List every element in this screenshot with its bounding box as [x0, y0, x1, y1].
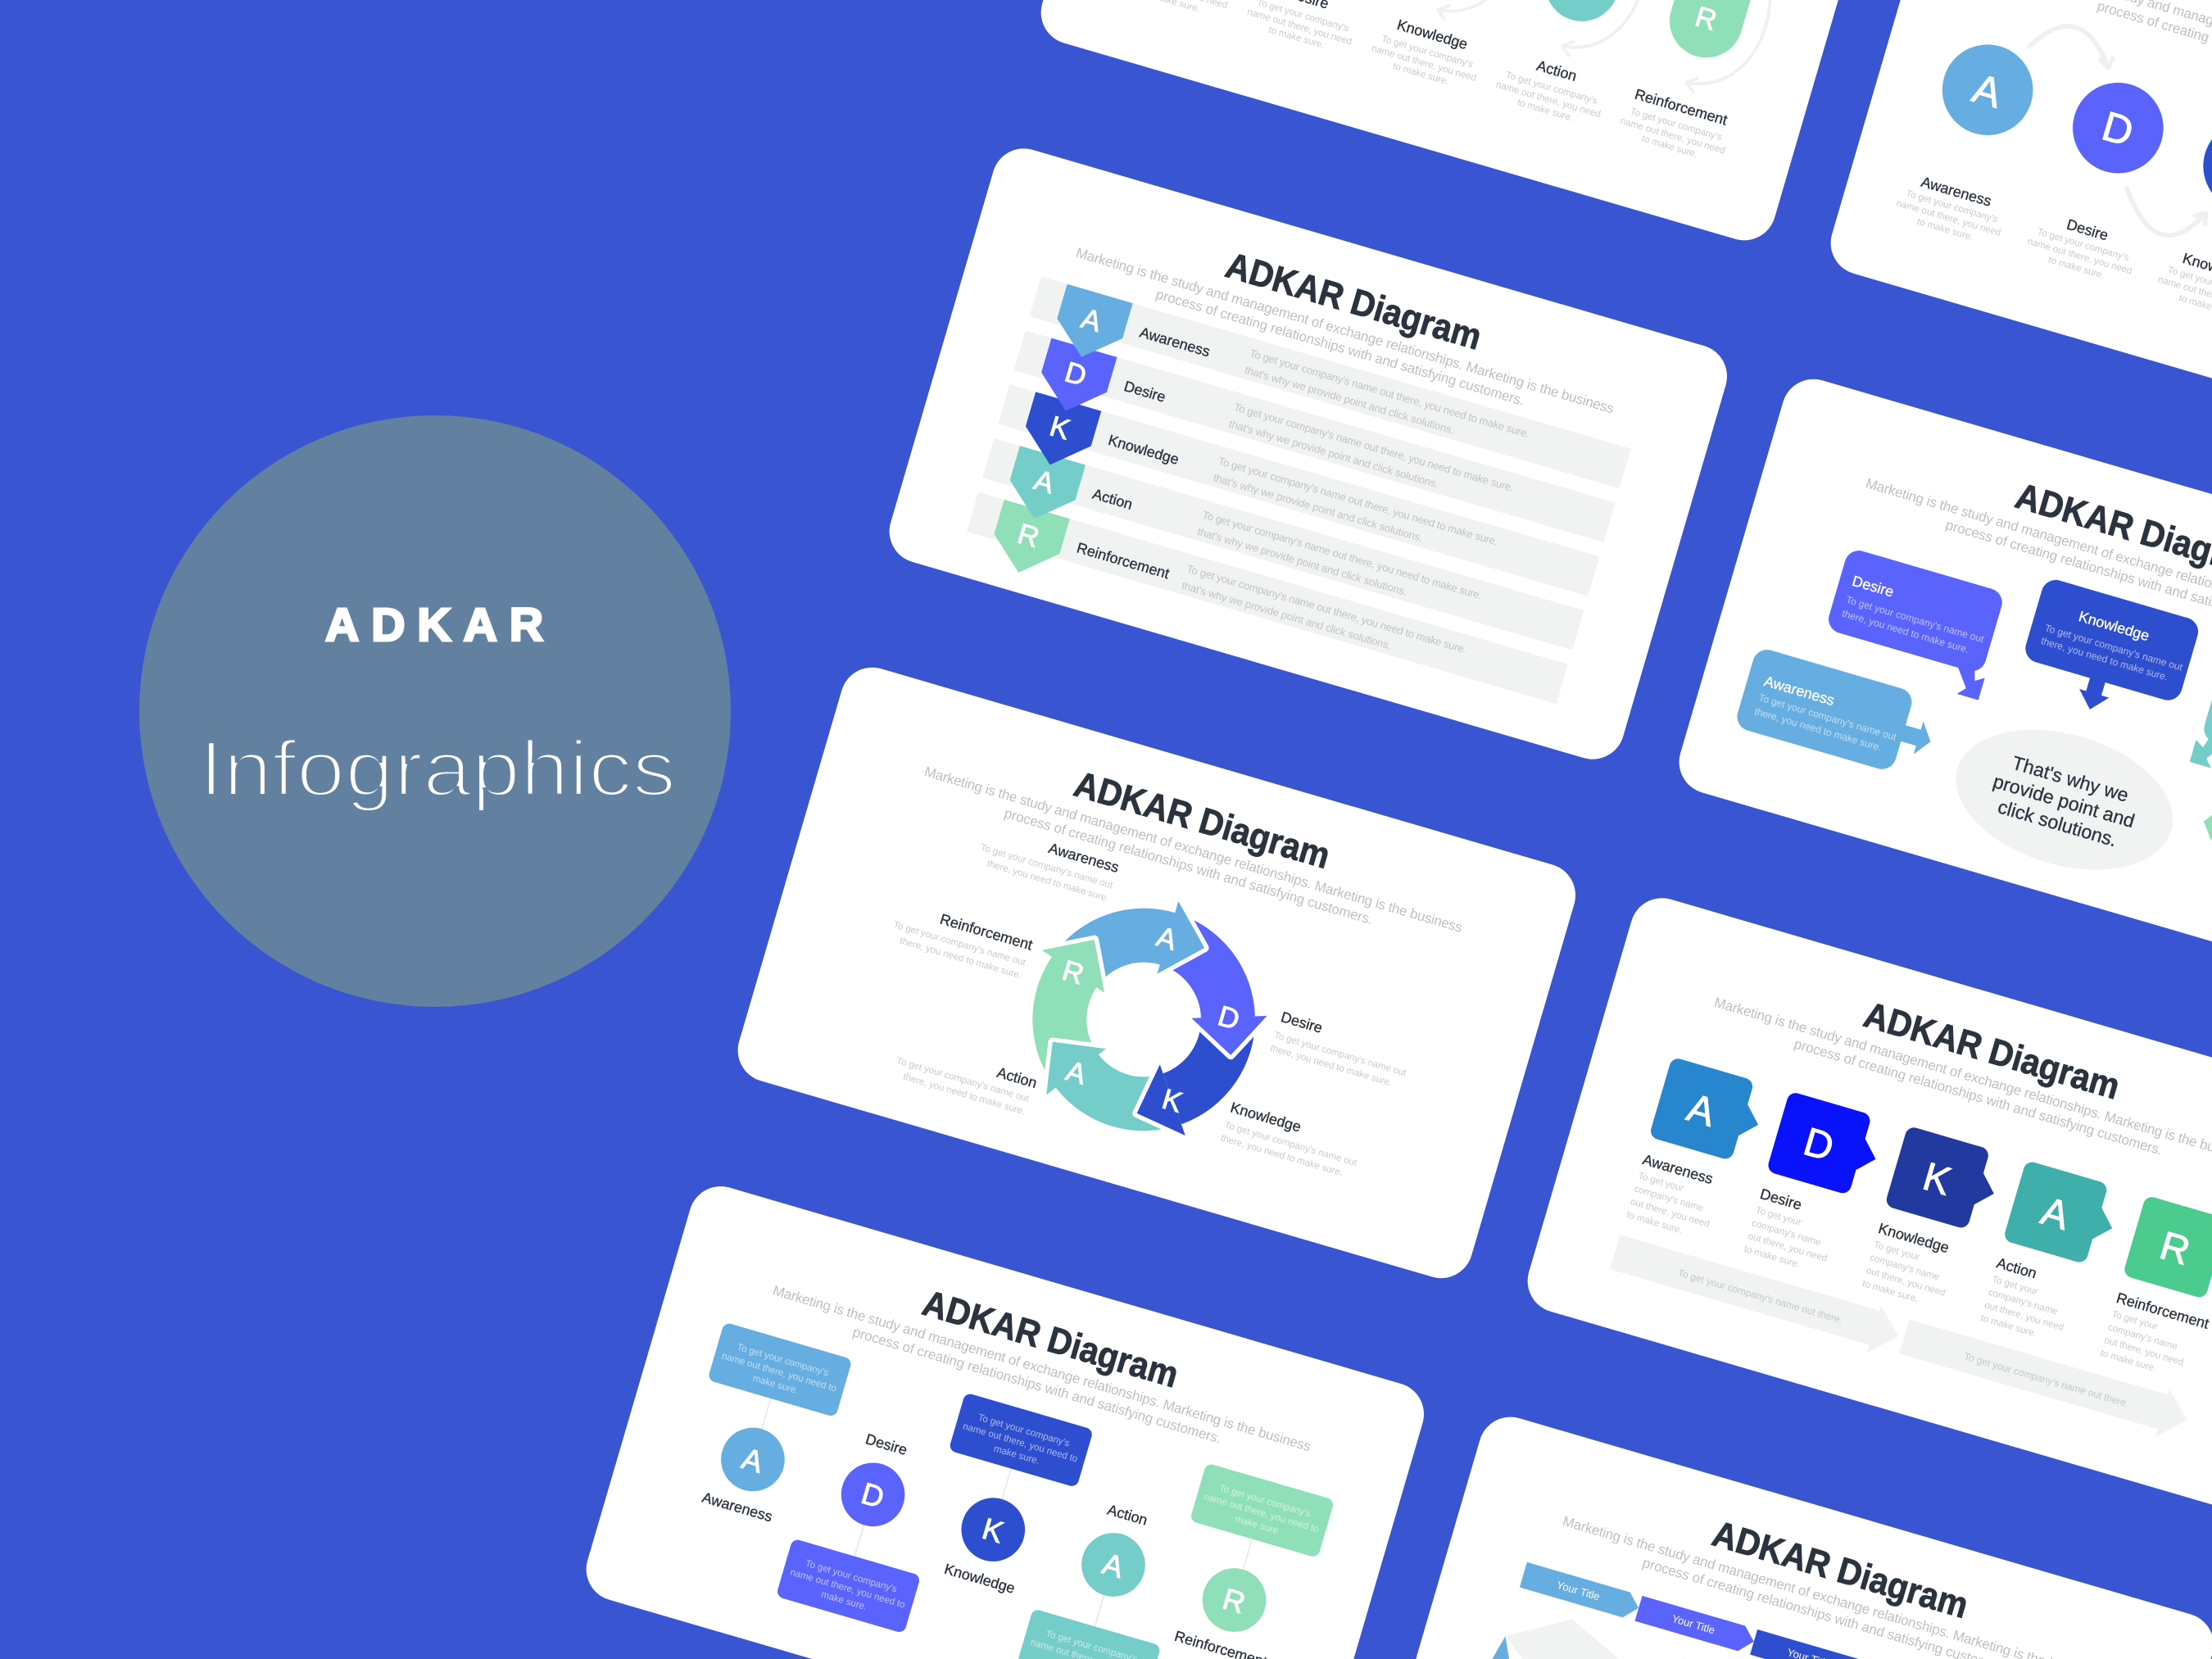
subtitle: process of creating relationships with and satisfying customers. — [1154, 287, 1526, 409]
node: Action: Action — [1106, 1502, 1149, 1529]
row: Reinforcement: R — [1014, 518, 1043, 554]
lower diagram shapes — [1484, 1600, 1711, 1659]
item: Action — [1979, 1160, 2124, 1351]
panel: pentagon list slide — [882, 141, 1734, 767]
labels: to make sure. — [1516, 97, 1575, 124]
callout: Awareness: To get your company's name out — [1757, 691, 1898, 743]
item: Awareness: Awareness — [1641, 1151, 1715, 1187]
item: Knowledge: Knowledge — [1877, 1220, 1951, 1256]
row: Action: A — [1031, 464, 1058, 500]
row: Action: that's why we provide point and click solutions. — [1196, 525, 1408, 598]
row: Knowledge: that's why we provide point and click solutions. — [1212, 471, 1425, 544]
panel: callout slide — [1671, 372, 2212, 998]
labels: name out there, you need — [1371, 43, 1478, 84]
labels: to make sure. — [1267, 25, 1326, 51]
labels: To get your company's — [2036, 226, 2130, 263]
item: Awareness: company's name — [1633, 1183, 1705, 1213]
subtitle — [2010, 0, 2212, 145]
item: Action: A — [2037, 1189, 2074, 1239]
item: Knowledge — [1861, 1126, 2006, 1317]
node: Desire: name out there, you need to — [789, 1566, 906, 1611]
callout: Knowledge — [2014, 577, 2201, 732]
labels: To get your company's — [1629, 106, 1723, 143]
pill row — [1163, 0, 1763, 66]
pill row: R — [1692, 0, 1720, 37]
item: Awareness: A — [1682, 1086, 1720, 1135]
label: Desire: To get your company's name out — [1273, 1030, 1408, 1079]
labels: To get your company's — [1380, 34, 1475, 70]
node: Reinforcement — [1155, 1462, 1335, 1659]
panel: circular cycle slide — [730, 660, 1583, 1285]
item: Awareness — [1625, 1057, 1770, 1248]
row: Awareness: To get your company's name out there, you need to make sure. — [1249, 347, 1531, 440]
callout: Knowledge: Knowledge — [2077, 608, 2151, 644]
callout: Knowledge: To get your company's name out — [2043, 622, 2184, 673]
panel: speech square slide — [1520, 891, 2212, 1516]
labels: name out there, you need — [1246, 7, 1353, 48]
node: Knowledge: make sure. — [993, 1444, 1040, 1466]
label: Desire: Desire — [1279, 1009, 1325, 1036]
label: Reinforcement: Reinforcement — [938, 911, 1035, 954]
label: Knowledge: To get your company's name out — [1223, 1120, 1359, 1168]
label: Knowledge: Knowledge — [1229, 1099, 1303, 1135]
item: Action: out there, you need — [1983, 1299, 2065, 1333]
panel: top middle slide — [1033, 0, 1886, 248]
item: Action: to make sure. — [1979, 1312, 2037, 1339]
row: Action: Action — [1090, 486, 1135, 513]
subtitle: Marketing is the study and management of exchange relationships. Marketing is the business — [771, 1283, 1312, 1454]
item: Action: Action — [1995, 1254, 2038, 1281]
labels: Awareness — [1920, 174, 1993, 210]
circle: D — [2062, 72, 2174, 184]
labels: To get your company's — [1905, 188, 1999, 225]
callout: Awareness — [1734, 646, 1942, 781]
chart: arrow ring — [968, 851, 1326, 1208]
callout: Action — [2190, 655, 2212, 809]
label: Action: Action — [995, 1064, 1039, 1091]
circle: K — [2192, 110, 2212, 222]
node: Reinforcement: To get your company's — [1218, 1482, 1312, 1519]
node: Desire: D — [858, 1476, 888, 1515]
item: Reinforcement: Reinforcement — [2115, 1290, 2211, 1332]
title: ADKAR Diagram — [1708, 1514, 1973, 1626]
chart: arrow ring: K — [1158, 1083, 1185, 1119]
arrow: left gray band: To get your company's name out there. — [1676, 1267, 1844, 1326]
panel: circle and box slide — [578, 1179, 1431, 1659]
item: Awareness: out there, you need — [1630, 1196, 1711, 1230]
label: Action — [891, 1036, 1039, 1118]
labels: name out there, you need — [1895, 197, 2002, 238]
node: Action: A — [1099, 1547, 1128, 1584]
arrow: right gray band — [1897, 1314, 2194, 1444]
chart: arrow ring: A — [1063, 1055, 1090, 1091]
item: Knowledge: To get your — [1873, 1240, 1921, 1262]
circle: D: D — [2097, 102, 2139, 156]
node: Action — [1016, 1489, 1196, 1659]
subtitle: process of creating relationships with and satisfying customers. — [1003, 805, 1375, 927]
item: Awareness: to make sure. — [1625, 1209, 1684, 1235]
node: Knowledge: name out there, you need to — [962, 1421, 1079, 1465]
node: Desire: Desire — [863, 1430, 909, 1458]
circle: A: A — [1968, 65, 2007, 117]
labels: to make sure. — [1640, 134, 1699, 160]
chevron: Your Title 1: Your Title — [1555, 1579, 1602, 1602]
title: ADKAR Diagram — [1222, 245, 1486, 358]
label: Reinforcement: there, you need to make sure. — [899, 936, 1023, 981]
labels: Knowledge — [1395, 16, 1470, 52]
row: Desire: Desire — [1122, 378, 1167, 406]
row: Reinforcement: Reinforcement — [1075, 539, 1172, 582]
chart: arrow ring: D — [1214, 999, 1243, 1036]
ellipse: central statement — [1939, 706, 2189, 894]
node: Awareness: A — [738, 1441, 768, 1480]
label: Awareness: there, you need to make sure. — [986, 858, 1110, 904]
arrow: right gray band: To get your company's name out there. — [1963, 1350, 2130, 1409]
arrow: left gray band — [1608, 1230, 1906, 1360]
item: Reinforcement: to make sure. — [2099, 1348, 2158, 1374]
row: Desire: that's why we provide point and click solutions. — [1227, 418, 1440, 490]
item: Reinforcement: company's name — [2107, 1321, 2178, 1352]
callout: Desire: Desire — [1851, 573, 1896, 601]
ellipse: central statement: That's why we — [2010, 752, 2131, 806]
callout: Awareness: there, you need to make sure. — [1753, 705, 1883, 754]
row: Reinforcement: To get your company's name out there, you need to make sure. — [1185, 562, 1468, 655]
labels — [1118, 0, 1735, 167]
callout: Reinforcement — [2192, 780, 2212, 914]
row: Action — [976, 438, 1584, 673]
item: Awareness: To get your — [1637, 1171, 1685, 1194]
panel: bottom right slide — [1368, 1409, 2212, 1659]
item: Action: company's name — [1987, 1287, 2059, 1317]
labels: to make sure. — [1916, 216, 1974, 243]
row: Knowledge — [991, 384, 1599, 620]
node: Awareness: Awareness — [700, 1489, 774, 1525]
chevron: Your Title 2 — [1635, 1596, 1757, 1655]
item: Reinforcement: To get your — [2110, 1308, 2159, 1332]
item: Knowledge: company's name — [1869, 1252, 1941, 1282]
item: Desire: To get your — [1754, 1204, 1802, 1228]
curved arrows — [1989, 16, 2212, 245]
label: Awareness: Awareness — [1047, 840, 1121, 876]
labels: Reinforcement — [1633, 86, 1729, 129]
item: Knowledge: K — [1918, 1154, 1956, 1204]
label: Awareness — [976, 822, 1121, 904]
item: Reinforcement: out there, you need — [2103, 1335, 2185, 1368]
node: Reinforcement: R — [1219, 1582, 1249, 1620]
labels: to make sure. — [1392, 61, 1450, 87]
item: Desire: company's name — [1751, 1217, 1822, 1248]
subtitle: Marketing is the study and management of exchange relationships. Marketing is the business — [922, 764, 1464, 936]
label: Action: there, you need to make sure. — [902, 1072, 1027, 1117]
node: Awareness: To get your company's — [736, 1342, 830, 1379]
row: Awareness: Awareness — [1138, 324, 1212, 360]
node: Knowledge: To get your company's — [977, 1412, 1071, 1449]
title: ADKAR Diagram — [1860, 995, 2124, 1108]
row: Desire: To get your company's name out there, you need to make sure. — [1232, 401, 1516, 494]
curved arrows — [1436, 0, 1773, 106]
row: Awareness: A — [1078, 302, 1105, 338]
row: Awareness: that's why we provide point and click solutions. — [1244, 364, 1456, 437]
item: Reinforcement — [2098, 1195, 2212, 1386]
node: Desire — [776, 1419, 956, 1634]
label: Knowledge — [1220, 1099, 1365, 1181]
node: Knowledge: Knowledge — [942, 1561, 1017, 1597]
node: Knowledge: K — [978, 1512, 1008, 1549]
item: Desire — [1742, 1091, 1888, 1282]
label: Knowledge: there, you need to make sure. — [1220, 1132, 1344, 1178]
callout: Desire: there, you need to make sure. — [1841, 608, 1970, 655]
ellipse: central statement: click solutions. — [1996, 796, 2119, 850]
label: Desire: there, you need to make sure. — [1269, 1043, 1394, 1088]
row: Awareness — [1022, 277, 1631, 512]
labels: name out there, you need — [1619, 116, 1726, 156]
item: Reinforcement: R — [2155, 1223, 2195, 1274]
callout: Desire: To get your company's name out — [1845, 594, 1986, 645]
labels: to make sure. — [2047, 255, 2105, 281]
callout: Desire — [1818, 547, 2010, 700]
row: Reinforcement: that's why we provide point and click solutions. — [1181, 579, 1393, 652]
item: Desire: out there, you need — [1747, 1231, 1829, 1264]
labels: To get your company's — [1505, 70, 1599, 107]
item: Knowledge: to make sure. — [1861, 1278, 1920, 1304]
chart: arrow ring: R — [1058, 954, 1087, 990]
row: Desire — [1007, 330, 1616, 566]
chevron: Your Title 3 — [1750, 1630, 1873, 1659]
callout: Knowledge: there, you need to make sure. — [2040, 635, 2169, 683]
label: Reinforcement — [888, 899, 1035, 981]
item: Desire: Desire — [1758, 1185, 1804, 1213]
node: Knowledge — [914, 1393, 1094, 1606]
subtitle: process of creating relationships with and satisfying customers. — [851, 1324, 1223, 1447]
node: Desire: make sure. — [820, 1589, 868, 1612]
row: Reinforcement — [959, 492, 1568, 728]
subtitle: process of creating relationships with and satisfying customers. — [1793, 1036, 2164, 1158]
row: Desire: D — [1061, 356, 1090, 392]
labels: name out there, you need — [2026, 236, 2133, 277]
title: ADKAR Diagram — [1070, 764, 1335, 877]
title: ADKAR Diagram — [918, 1283, 1183, 1395]
item: Action: To get your — [1991, 1274, 2039, 1297]
label: Awareness: To get your company's name out — [979, 842, 1115, 891]
subtitle — [1859, 475, 2212, 664]
row: Knowledge: K — [1046, 410, 1073, 446]
item: Knowledge: out there, you need — [1865, 1265, 1947, 1299]
node: Desire: To get your company's — [805, 1558, 899, 1595]
item: Desire: to make sure. — [1743, 1244, 1802, 1270]
chart: arrow ring: A — [1153, 921, 1181, 957]
panel: top right slide — [1823, 0, 2212, 478]
panel: hero circle — [139, 415, 731, 1007]
node: Reinforcement: name out there, you need to — [1203, 1491, 1320, 1534]
item: Desire: D — [1799, 1119, 1838, 1170]
heading: Infographics: Infographics — [199, 725, 676, 813]
labels: name out there, you need — [1495, 79, 1602, 120]
node: Awareness: name out there, you need to — [720, 1350, 838, 1394]
labels: Action — [1534, 57, 1579, 84]
labels: Desire — [2065, 216, 2110, 243]
callout: Awareness: Awareness — [1762, 673, 1837, 709]
ellipse: central statement: provide point and — [1991, 770, 2137, 832]
subtitle: Marketing is the study and management of exchange relationships. Marketing is the business — [1074, 245, 1616, 417]
heading: ADKAR: ADKAR — [325, 599, 543, 651]
chevron: Your Title 1 — [1520, 1562, 1643, 1621]
row: Knowledge: Knowledge — [1106, 432, 1181, 468]
label: Action: To get your company's name out — [895, 1055, 1031, 1104]
label: Desire — [1269, 1009, 1415, 1091]
label: Reinforcement: To get your company's name out — [892, 919, 1027, 968]
circle: A — [1932, 34, 2044, 146]
row: Knowledge: To get your company's name out there, you need to make sure. — [1217, 455, 1499, 548]
node: Awareness — [673, 1322, 853, 1534]
chevron: Your Title 2: Your Title — [1670, 1612, 1716, 1636]
labels — [1892, 169, 2212, 326]
node: Reinforcement: make sure. — [1234, 1513, 1282, 1537]
row: Action: To get your company's name out there, you need to make sure. — [1201, 509, 1484, 602]
node: Awareness: make sure. — [751, 1373, 800, 1396]
